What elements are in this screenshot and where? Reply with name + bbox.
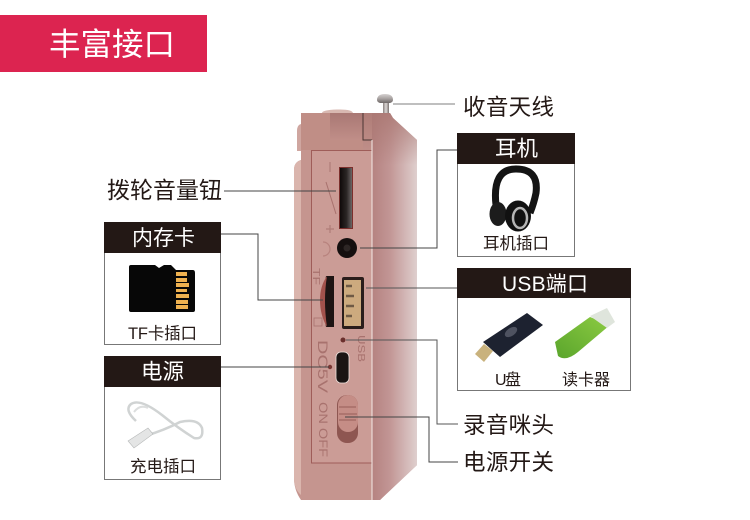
icon: USB flash drive <box>475 313 543 362</box>
panel: headphone: 耳机插口 <box>483 234 549 253</box>
panel: USB: 读卡器 <box>562 371 610 389</box>
charging port: DC5V <box>315 340 331 394</box>
leader: volume dial <box>224 190 336 192</box>
power switch <box>316 395 358 457</box>
power switch: ON OFF <box>316 402 330 457</box>
leader: antenna <box>393 103 455 105</box>
leader: device centre seam <box>363 113 372 500</box>
label: volume dial: 拨轮音量钮 <box>107 177 222 203</box>
title banner: 丰富接口 <box>49 26 175 62</box>
leader: USB <box>366 287 457 289</box>
icon: headphones <box>490 169 536 232</box>
USB port <box>342 277 366 362</box>
TF card slot: TF <box>310 268 321 285</box>
leader: microphone <box>346 340 458 424</box>
icon: TF card <box>129 265 195 312</box>
leader: power switch <box>345 417 458 462</box>
TF card slot <box>310 268 334 327</box>
icon: charging cable <box>128 402 202 448</box>
panel: headphone <box>457 133 575 256</box>
label: power switch: 电源开关 <box>463 450 554 475</box>
device body <box>294 109 417 500</box>
volume dial <box>326 162 353 233</box>
microphone hole <box>340 338 346 342</box>
panel: USB <box>457 268 631 390</box>
leader: memory card <box>221 234 323 300</box>
control panel <box>311 150 372 463</box>
panel: power <box>104 356 221 480</box>
icon: green card reader <box>555 308 615 358</box>
USB port: USB <box>355 335 366 362</box>
panel: headphone: 耳机 <box>495 137 538 161</box>
leader: headphone <box>360 150 457 248</box>
panel: memory card: TF卡插口 <box>128 324 197 343</box>
panel: memory card <box>104 222 221 344</box>
panel: USB: U盘 <box>495 370 521 389</box>
panel: memory card: 内存卡 <box>132 227 195 250</box>
headphone jack <box>323 238 357 258</box>
title banner <box>0 15 207 72</box>
panel: USB: USB端口 <box>502 273 588 296</box>
panel: power: 充电插口 <box>130 457 196 476</box>
device: side view of radio <box>294 94 417 500</box>
label: microphone: 录音咪头 <box>463 413 554 438</box>
panel: power: 电源 <box>141 360 184 384</box>
charging port <box>315 340 349 394</box>
antenna <box>377 94 393 114</box>
label: antenna: 收音天线 <box>463 95 554 120</box>
leader: power <box>221 366 329 368</box>
